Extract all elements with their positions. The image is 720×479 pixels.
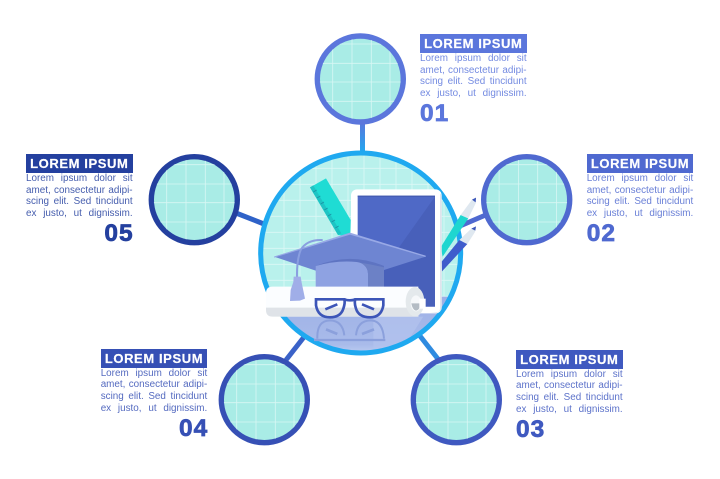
paragraph 04 [101,368,208,414]
paragraph 03: scing elit. Sed tincidunt [516,392,623,403]
central education illustration [257,150,476,357]
paragraph 03: amet, consectetur adipi- [516,380,623,391]
paper scroll [266,287,426,317]
circle 2 [481,154,572,246]
text block 01 [420,34,527,127]
infographic canvas [26,33,694,446]
number 03: 03 [516,416,545,442]
paragraph 02 [587,173,694,219]
glasses [316,299,383,317]
heading 01: LOREM IPSUM [424,36,522,51]
paragraph 05: Lorem ipsum dolor sit [26,173,133,184]
heading 05: LOREM IPSUM [30,156,128,171]
paragraph 01: scing elit. Sed tincidunt [420,76,527,87]
paragraph 04: amet, consectetur adipi- [101,379,207,390]
circle 4 [218,354,310,446]
circle 1 [314,33,406,125]
paragraph 03 [516,369,623,415]
glasses reflection [314,320,385,340]
graduation cap [274,233,426,287]
paragraph 01 [420,53,527,99]
cap crown [316,261,368,287]
paragraph 02: ex justo, ut dignissim. [587,208,693,219]
paragraph 04: ex justo, ut dignissim. [101,403,207,414]
circle 3 [410,354,502,446]
tassel cord [297,240,323,277]
heading 02: LOREM IPSUM [591,156,689,171]
circle 5 [148,154,240,246]
paragraph 03: Lorem ipsum dolor sit [516,369,623,380]
pencil: teal [441,198,476,257]
hub ring [261,153,461,353]
number 02: 02 [587,220,616,247]
text block 04 [101,349,208,442]
connector 3 [420,336,438,359]
text block 03 [516,350,623,442]
connector 1 [360,122,365,153]
number 01: 01 [420,100,449,127]
paragraph 01: amet, consectetur adipi- [420,65,527,76]
connector 4 [286,337,304,360]
cap board [274,234,426,273]
paragraph 03: ex justo, ut dignissim. [516,404,623,415]
ruler [310,178,351,237]
paragraph 01: Lorem ipsum dolor sit [420,53,527,64]
number 04: 04 [179,414,208,442]
tassel [290,277,305,301]
tablet [351,189,442,313]
paragraph 05: amet, consectetur adipi- [26,185,133,196]
diagram: hub and spoke circles [148,33,572,446]
cap crown shadow [316,259,384,271]
connector 2 [460,214,488,226]
paragraph 01: ex justo, ut dignissim. [420,88,527,99]
hub background and grid [263,156,458,350]
text block 02 [587,154,694,247]
paragraph 04: Lorem ipsum dolor sit [101,368,207,379]
heading 04: LOREM IPSUM [105,351,203,366]
paragraph 02: scing elit. Sed tincidunt [587,196,693,207]
paragraph 05: ex justo, ut dignissim. [26,208,133,219]
connector 5 [236,213,264,224]
number 05: 05 [104,220,134,247]
paragraph 04: scing elit. Sed tincidunt [101,391,207,402]
paragraph 02: Lorem ipsum dolor sit [587,173,693,184]
paragraph 05 [26,173,133,219]
pencil: blue [442,226,476,271]
text block 05 [26,154,134,247]
paragraph 05: scing elit. Sed tincidunt [26,196,133,207]
heading 03: LOREM IPSUM [520,352,618,367]
paragraph 02: amet, consectetur adipi- [587,185,693,196]
